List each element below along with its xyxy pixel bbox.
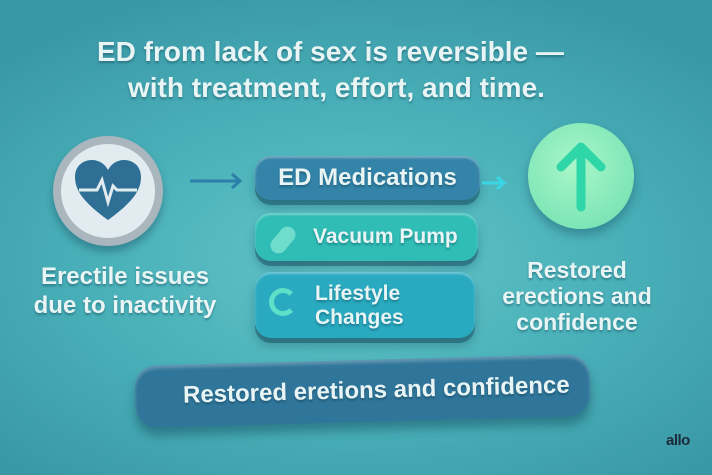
arrow right bbox=[482, 176, 506, 190]
pill: vacuum pump bbox=[255, 213, 478, 261]
text: left label bbox=[34, 263, 216, 321]
pill: ED medications: ED Medications bbox=[278, 164, 457, 191]
arrow left bbox=[190, 173, 242, 189]
pill: lifestyle changes: Changes bbox=[315, 306, 404, 329]
logo: allo bbox=[666, 432, 690, 449]
icon: pill bbox=[267, 223, 299, 257]
text: right label bbox=[502, 257, 652, 335]
title: ED from lack of sex is reversible — bbox=[97, 36, 564, 67]
pill: lifestyle changes: Lifestyle bbox=[315, 282, 400, 305]
icon: green up circle bbox=[528, 123, 634, 229]
bottom bar: Restored eretions and confidence bbox=[183, 372, 570, 409]
text: right label: erections and bbox=[502, 283, 652, 309]
pill: lifestyle changes bbox=[255, 272, 475, 338]
text: left label: Erectile issues bbox=[41, 263, 209, 290]
title: with treatment, effort, and time. bbox=[128, 72, 545, 103]
icon: heart circle bbox=[53, 136, 163, 246]
title bbox=[97, 36, 564, 104]
text: right label: Restored bbox=[527, 257, 627, 283]
pill: ED medications bbox=[255, 156, 480, 200]
pill: vacuum pump: Vacuum Pump bbox=[313, 225, 458, 248]
bottom bar bbox=[134, 354, 591, 428]
text: right label: confidence bbox=[516, 309, 638, 335]
text: left label: due to inactivity bbox=[34, 292, 216, 319]
icon: cycle bbox=[269, 288, 297, 316]
